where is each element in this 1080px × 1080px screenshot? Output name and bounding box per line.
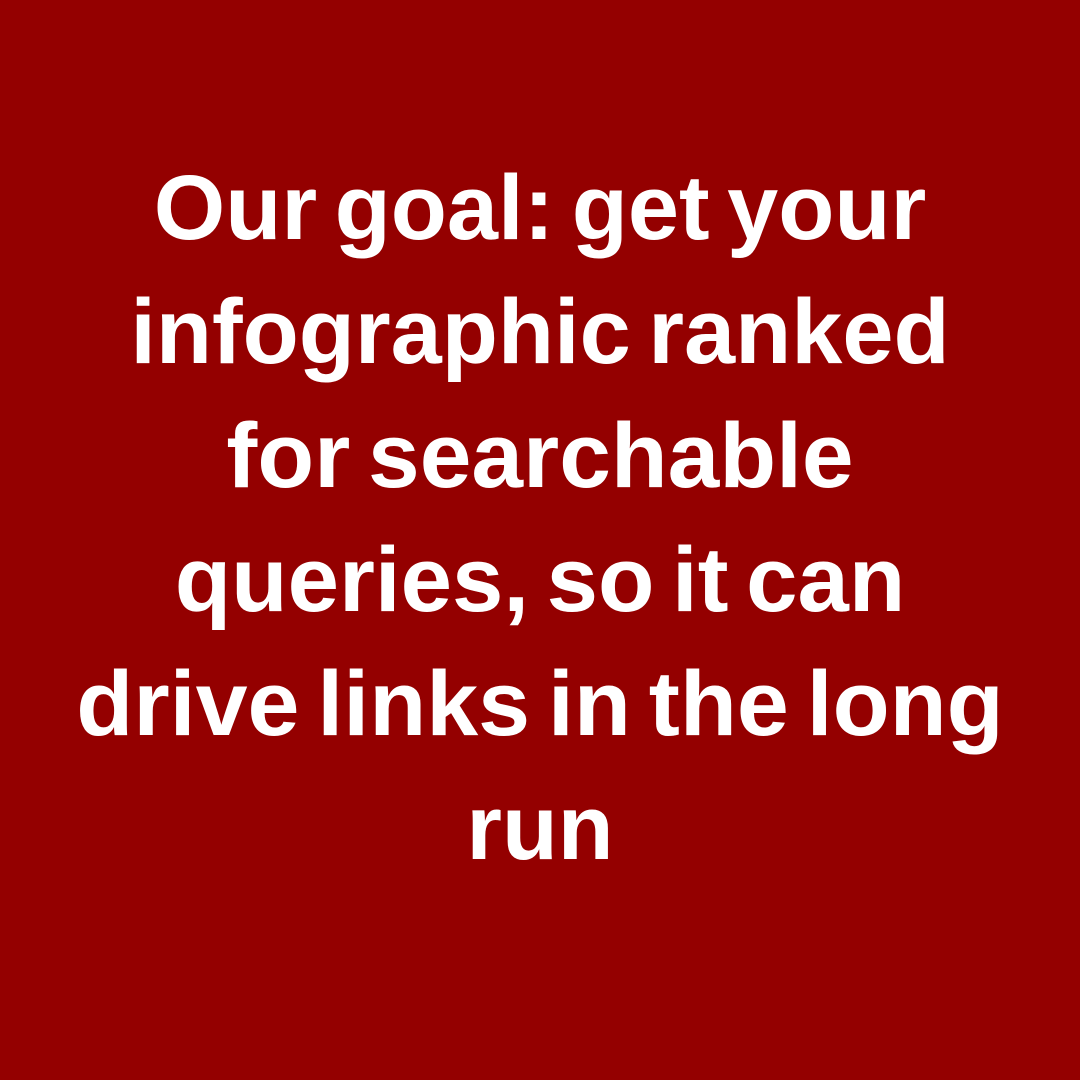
title text block: queries, so it can <box>175 529 905 631</box>
title text block: for searchable <box>226 405 854 507</box>
title text block: infographic ranked <box>130 281 950 383</box>
title text block: Our goal: get your <box>154 157 926 259</box>
title text block: run <box>466 777 614 879</box>
title text block: drive links in the long <box>76 653 1004 755</box>
title text block <box>76 157 1004 879</box>
